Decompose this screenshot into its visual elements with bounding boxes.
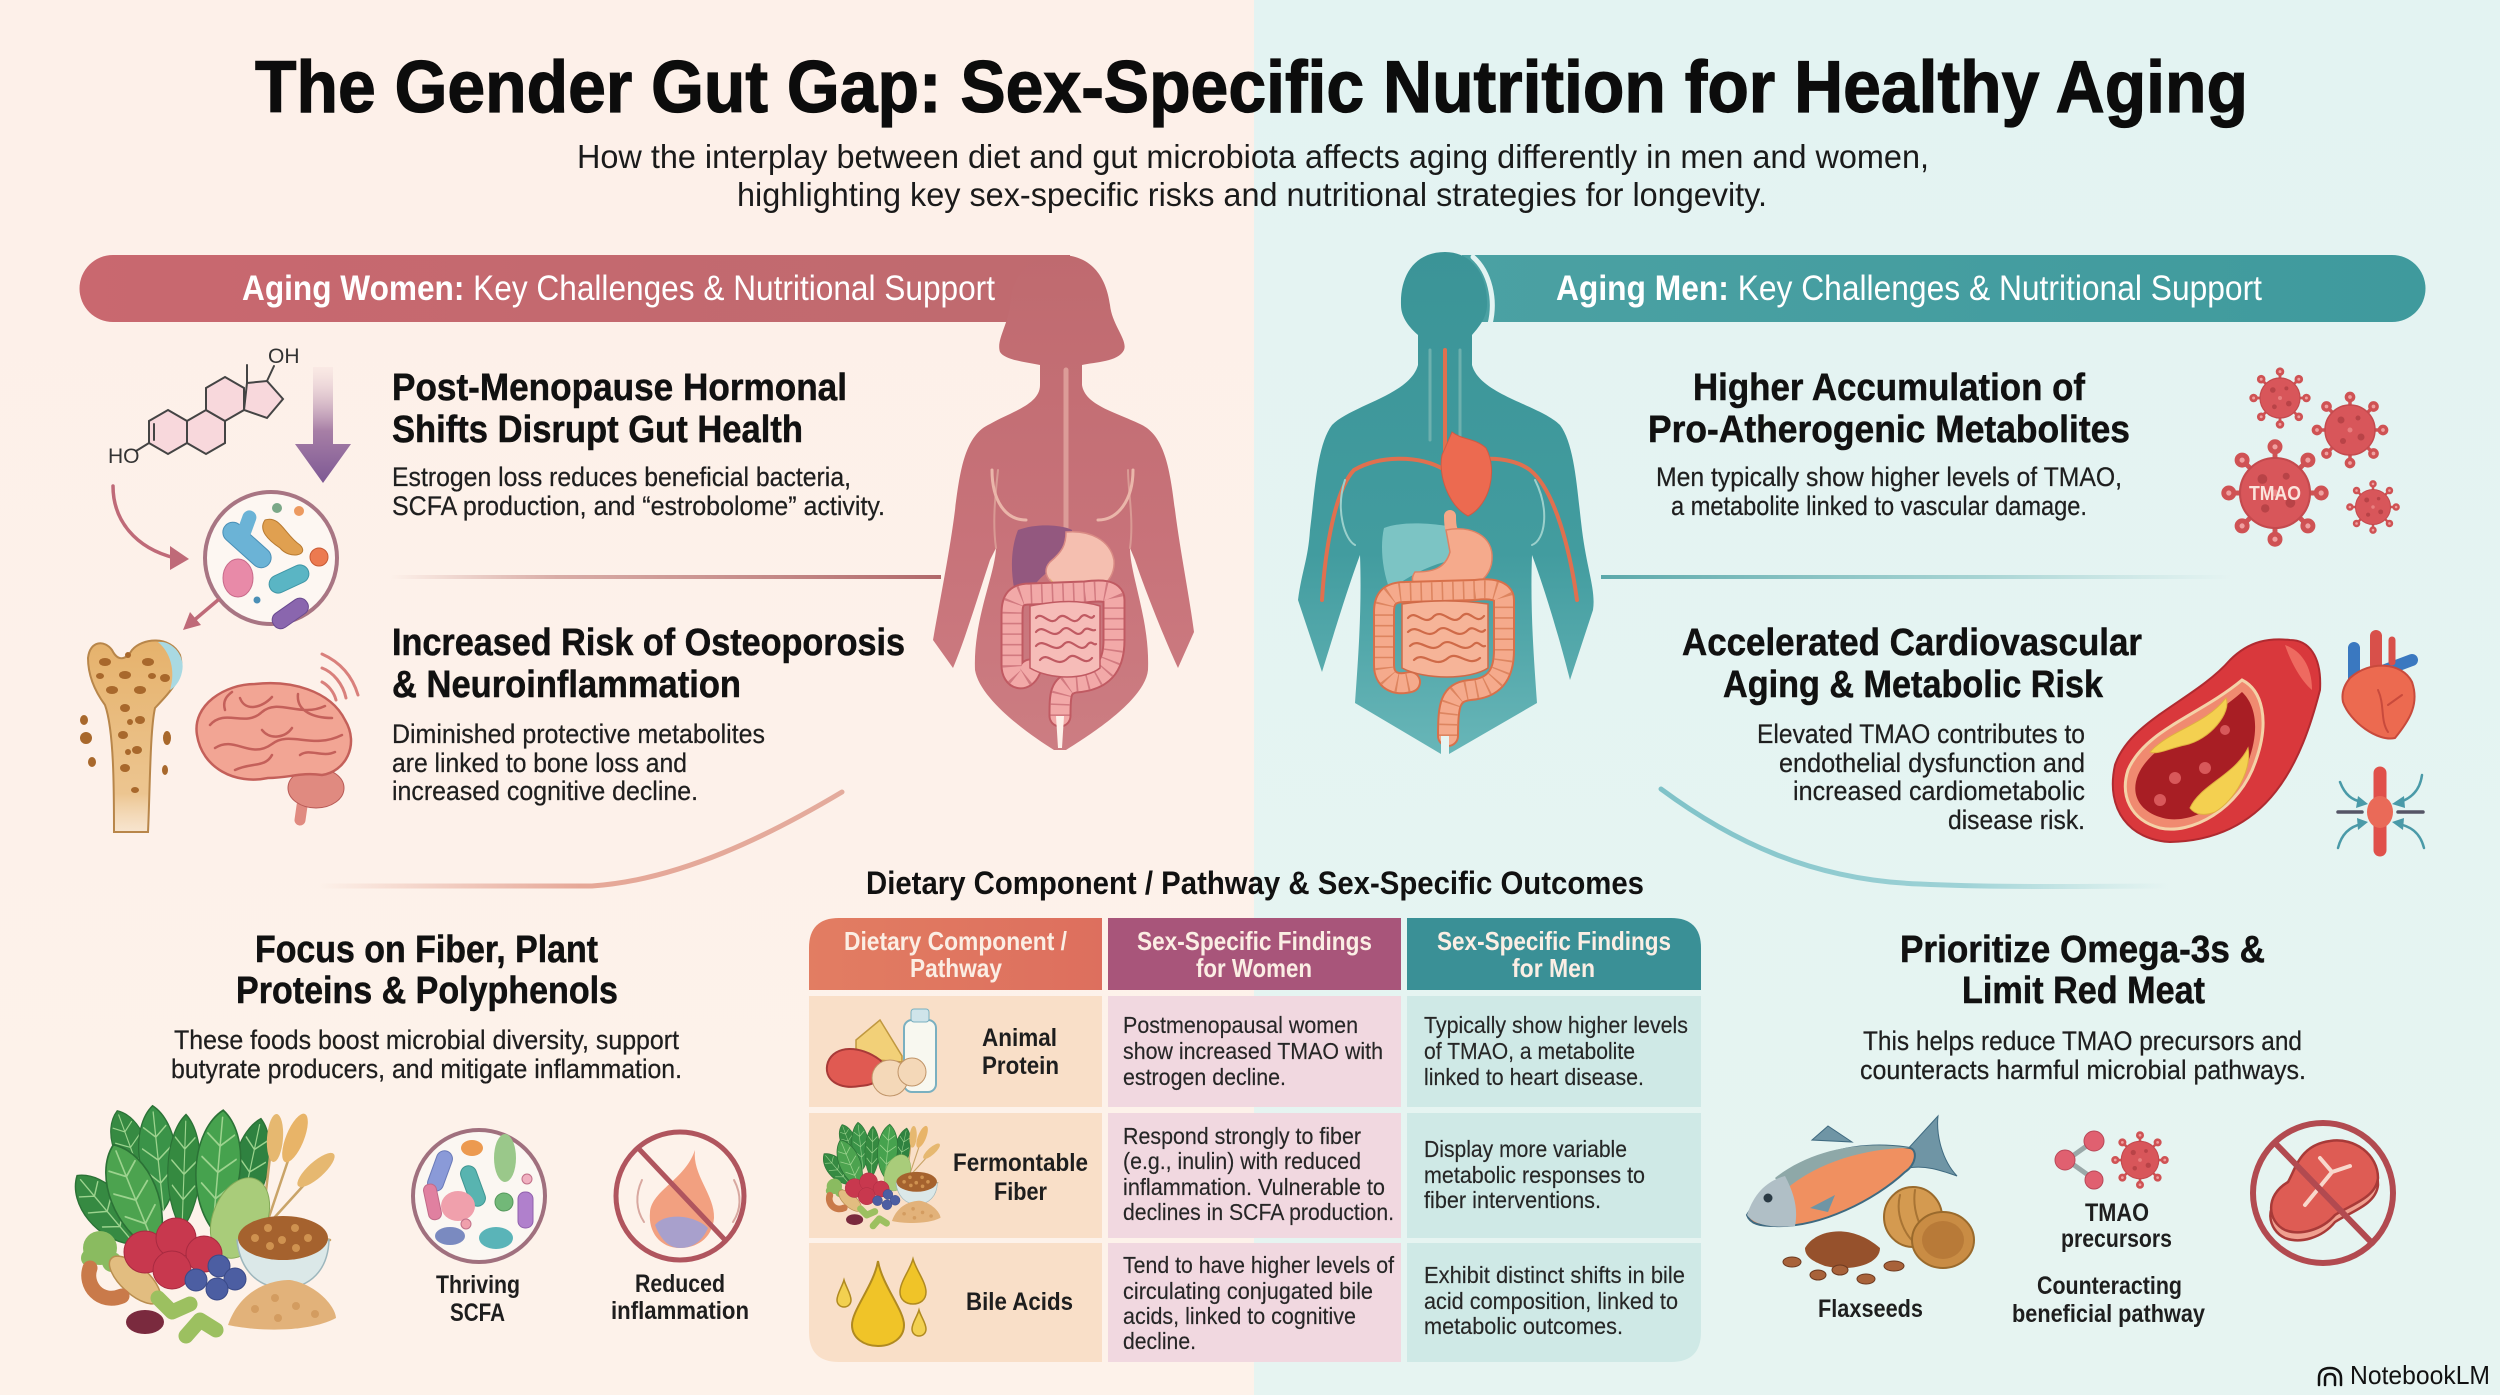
text block: cardiovascular aging: Accelerated Cardiovascular xyxy=(1682,622,2142,664)
arrow: estrogen decline xyxy=(295,367,351,483)
text block: cardiovascular aging: endothelial dysfunction and xyxy=(1779,748,2085,778)
row: fermentable fiber: Fiber xyxy=(994,1178,1047,1206)
table header row xyxy=(809,918,1701,990)
table header row: for Men xyxy=(1512,953,1595,983)
label: counteracting beneficial pathway: Counteracting xyxy=(2037,1272,2182,1300)
row: fermentable fiber: inflammation. Vulnerable to xyxy=(1123,1174,1385,1200)
banner: aging women: Aging Women: Key Challenges & Nutritional Support xyxy=(242,269,995,308)
text block: osteoporosis: & Neuroinflammation xyxy=(392,664,741,706)
text block: women's nutrition: These foods boost microbial diversity, support xyxy=(174,1025,679,1055)
arrow: microbiome to bone xyxy=(183,600,218,630)
text block: cardiovascular aging xyxy=(1682,622,2142,835)
text block: cardiovascular aging: disease risk. xyxy=(1948,805,2085,835)
text block: post-menopause xyxy=(392,367,885,521)
row: fermentable fiber: Display more variable xyxy=(1424,1136,1627,1162)
icon: constricted vessel with arrows xyxy=(2338,773,2424,850)
icon: brain with signal waves xyxy=(196,654,358,820)
text block: men's nutrition: Limit Red Meat xyxy=(1962,970,2205,1012)
icon: plant foods xyxy=(62,1104,339,1336)
banner: aging men: Aging Men: Key Challenges & Nutritional Support xyxy=(1556,269,2262,308)
row: bile acids: metabolic outcomes. xyxy=(1424,1313,1623,1339)
text block: osteoporosis: Increased Risk of Osteoporosis xyxy=(392,622,905,664)
row: bile acids: Bile Acids xyxy=(966,1288,1073,1316)
row: animal protein: of TMAO, a metabolite xyxy=(1424,1038,1635,1064)
subtitle: highlighting key sex-specific risks and nutritional strategies for longevity. xyxy=(737,176,1767,213)
label: TMAO precursors: precursors xyxy=(2061,1225,2172,1253)
icon: no red meat xyxy=(2253,1123,2393,1263)
row: bile acids: Tend to have higher levels of xyxy=(1123,1252,1394,1278)
text block: men's nutrition: Prioritize Omega-3s & xyxy=(1900,929,2265,971)
label: reduced inflammation: Reduced xyxy=(635,1270,725,1298)
row: bile acids: circulating conjugated bile xyxy=(1123,1278,1373,1304)
banner: aging women xyxy=(79,255,1070,322)
label: counteracting beneficial pathway: beneficial pathway xyxy=(2012,1300,2205,1328)
text block: cardiovascular aging: Aging & Metabolic Risk xyxy=(1723,664,2104,706)
icon: estrogen molecule: HO xyxy=(108,445,140,468)
icon: artery with plaque xyxy=(2113,639,2320,842)
icon: walnuts and flaxseeds xyxy=(1783,1187,1974,1284)
text block: post-menopause: Estrogen loss reduces beneficial bacteria, xyxy=(392,462,851,492)
text block: osteoporosis xyxy=(392,622,905,806)
label: TMAO precursors xyxy=(2061,1199,2172,1253)
label: reduced inflammation: inflammation xyxy=(611,1297,749,1325)
text block: men's nutrition: counteracts harmful microbial pathways. xyxy=(1860,1055,2306,1085)
icon: thriving SCFA xyxy=(413,1130,545,1262)
male body silhouette with organs xyxy=(1298,252,1594,754)
row: fermentable fiber: Fermontable xyxy=(953,1149,1088,1177)
table title: Dietary Component / Pathway & Sex-Specific Outcomes xyxy=(866,865,1644,901)
row: bile acids: acid composition, linked to xyxy=(1424,1288,1678,1314)
icon: TMAO precursors molecules xyxy=(2055,1131,2167,1189)
text block: men's nutrition: This helps reduce TMAO precursors and xyxy=(1863,1026,2302,1056)
row: animal protein: Typically show higher levels xyxy=(1424,1012,1688,1038)
table header row: for Women xyxy=(1196,953,1312,983)
label: flaxseeds: Flaxseeds xyxy=(1818,1295,1923,1323)
text block: osteoporosis: are linked to bone loss and xyxy=(392,748,687,778)
background left xyxy=(0,0,1254,1395)
row: fermentable fiber: declines in SCFA production. xyxy=(1123,1199,1394,1225)
text block: TMAO metabolites xyxy=(1648,367,2130,521)
row: animal protein: show increased TMAO with xyxy=(1123,1038,1383,1064)
icon: heart xyxy=(2342,636,2415,739)
table header row: Pathway xyxy=(910,953,1002,983)
text block: women's nutrition: Proteins & Polyphenols xyxy=(236,970,618,1012)
label: thriving SCFA: Thriving xyxy=(436,1271,520,1299)
row: animal protein: Protein xyxy=(982,1052,1059,1080)
title: The Gender Gut Gap: Sex-Specific Nutrition for Healthy Aging xyxy=(255,47,2248,128)
row: animal protein xyxy=(809,996,1701,1107)
row: bile acids: acids, linked to cognitive xyxy=(1123,1303,1356,1329)
banner: aging men xyxy=(1462,255,2426,322)
row: bile acids: Exhibit distinct shifts in bile xyxy=(1424,1262,1685,1288)
text block: osteoporosis: Diminished protective metabolites xyxy=(392,719,765,749)
row: bile acids: decline. xyxy=(1123,1328,1196,1354)
table header row: Dietary Component / xyxy=(844,926,1067,956)
text block: TMAO metabolites: Men typically show higher levels of TMAO, xyxy=(1656,462,2122,492)
row: bile acids xyxy=(809,1243,1701,1362)
text block: TMAO metabolites: Pro-Atherogenic Metabolites xyxy=(1648,409,2130,451)
text block: women's nutrition: butyrate producers, and mitigate inflammation. xyxy=(171,1054,682,1084)
row: fermentable fiber: (e.g., inulin) with reduced xyxy=(1123,1148,1361,1174)
subtitle xyxy=(577,138,1929,213)
label: TMAO precursors: TMAO xyxy=(2085,1199,2149,1227)
text block: post-menopause: Post-Menopause Hormonal xyxy=(392,367,847,409)
logo: NotebookLM: NotebookLM xyxy=(2350,1360,2490,1390)
label: thriving SCFA: SCFA xyxy=(450,1299,505,1327)
text block: TMAO metabolites: a metabolite linked to vascular damage. xyxy=(1671,491,2087,521)
row: animal protein: Animal xyxy=(982,1024,1057,1052)
text block: osteoporosis: increased cognitive decline. xyxy=(392,776,698,806)
row: fermentable fiber: metabolic responses to xyxy=(1424,1162,1645,1188)
text block: post-menopause: Shifts Disrupt Gut Health xyxy=(392,409,803,451)
comparison table xyxy=(809,918,1701,1362)
text block: post-menopause: SCFA production, and “estrobolome” activity. xyxy=(392,491,885,521)
table header row: Sex-Specific Findings xyxy=(1137,926,1372,956)
text block: cardiovascular aging: Elevated TMAO contributes to xyxy=(1757,719,2085,749)
icon: reduced inflammation xyxy=(616,1132,744,1260)
row: animal protein: Postmenopausal women xyxy=(1123,1012,1358,1038)
icon: bacteria circle xyxy=(205,492,337,632)
row: fermentable fiber xyxy=(809,1113,1701,1238)
row: fermentable fiber: Respond strongly to fiber xyxy=(1123,1123,1361,1149)
text block: TMAO metabolites: Higher Accumulation of xyxy=(1693,367,2085,409)
label: thriving SCFA xyxy=(436,1271,520,1327)
female body silhouette with organs xyxy=(933,255,1194,750)
row: animal protein: estrogen decline. xyxy=(1123,1064,1286,1090)
arrow: estrogen to microbiome xyxy=(113,486,189,570)
label: counteracting beneficial pathway xyxy=(2012,1272,2205,1328)
icon: TMAO viruses xyxy=(2224,369,2399,544)
text block: women's nutrition: Focus on Fiber, Plant xyxy=(255,929,598,971)
background right xyxy=(1254,0,2500,1395)
row: animal protein: linked to heart disease. xyxy=(1424,1064,1644,1090)
text block: women's nutrition xyxy=(171,929,682,1084)
subtitle: How the interplay between diet and gut microbiota affects aging differently in men and women, xyxy=(577,138,1929,175)
icon: estrogen molecule xyxy=(108,345,300,468)
icon: estrogen molecule: OH xyxy=(268,345,300,368)
icon: TMAO viruses: TMAO xyxy=(2249,483,2301,505)
table header row: Sex-Specific Findings xyxy=(1437,926,1671,956)
label: reduced inflammation xyxy=(611,1270,749,1325)
icon: bone xyxy=(80,640,183,832)
icon: salmon xyxy=(1747,1116,1957,1227)
text block: cardiovascular aging: increased cardiometabolic xyxy=(1793,776,2085,806)
row: fermentable fiber: fiber interventions. xyxy=(1424,1187,1601,1213)
text block: men's nutrition xyxy=(1860,929,2306,1085)
